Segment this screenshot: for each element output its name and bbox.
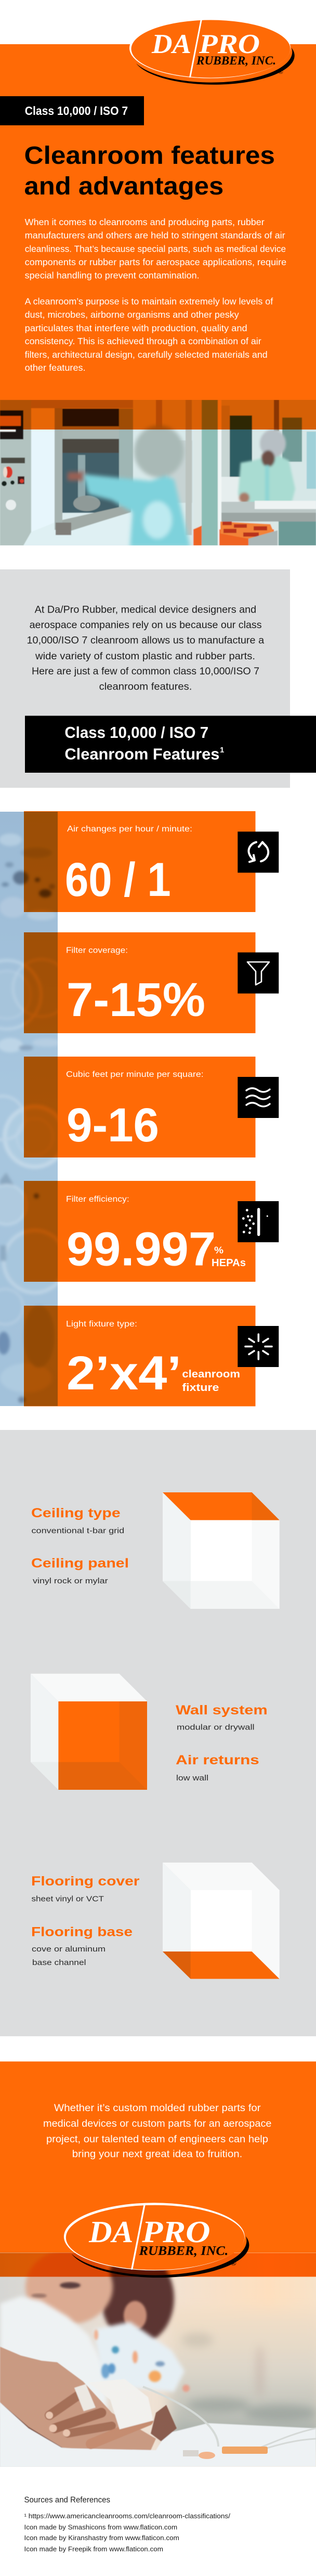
cube: floor highlighted — [163, 1863, 280, 1979]
logo: bottom: PRO — [141, 2215, 210, 2249]
sources and references: Icon made by Freepik from www.flaticon.com — [24, 2546, 163, 2553]
logo: top — [129, 18, 295, 85]
sources and references: ¹ https://www.americancleanrooms.com/cleanroom-classifications/ — [24, 2513, 231, 2520]
flooring text: Flooring base — [31, 1925, 133, 1940]
icon: light burst — [238, 1326, 279, 1367]
sources and references: Icon made by Smashicons from www.flaticon.com — [24, 2523, 177, 2531]
card: filter coverage: 7-15% — [67, 973, 205, 1026]
panel: orange intro — [0, 44, 316, 430]
intro paragraph 2: other features. — [25, 362, 86, 373]
logo: top: PRO — [199, 29, 260, 59]
intro paragraph 1: special handling to prevent contamination. — [25, 270, 200, 281]
flooring text: cove or aluminum — [32, 1945, 106, 1954]
card: filter efficiency — [24, 1181, 279, 1282]
wall text — [176, 1703, 268, 1783]
orange overlay band — [0, 400, 316, 430]
closing text — [43, 2103, 271, 2160]
closing text: project, our talented team of engineers can help — [46, 2134, 268, 2145]
card: cubic feet per minute: 9-16 — [67, 1099, 159, 1152]
title: Cleanroom features — [24, 142, 275, 170]
sources and references: Sources and References — [24, 2496, 110, 2505]
ceiling text: vinyl rock or mylar — [33, 1577, 108, 1585]
closing text: medical devices or custom parts for an aerospace — [43, 2118, 271, 2129]
grey panel text: wide variety of custom plastic and rubber parts. — [35, 650, 255, 662]
flooring text: base channel — [32, 1959, 86, 1967]
card: filter efficiency: Filter efficiency: — [66, 1195, 129, 1204]
intro paragraph 2: particulates that interfere with production, quality and — [25, 323, 247, 333]
wall text: Air returns — [176, 1753, 259, 1767]
card: filter efficiency: % — [214, 1245, 223, 1255]
wall text: low wall — [176, 1774, 208, 1783]
card: light fixture — [24, 1306, 279, 1406]
logo: bottom: DA — [88, 2215, 133, 2249]
card: light fixture: Light fixture type: — [66, 1320, 137, 1329]
grey panel text: Here are just a few of common class 10,000/ISO 7 — [32, 666, 259, 677]
icon: particles through filter — [238, 1201, 279, 1242]
closing text: bring your next great idea to fruition. — [72, 2149, 242, 2160]
grey panel text: cleanroom features. — [99, 681, 192, 693]
heading bar: cleanroom features — [25, 715, 316, 773]
flooring text: Flooring cover — [31, 1874, 140, 1889]
card: light fixture: fixture — [182, 1382, 219, 1394]
title — [24, 142, 275, 200]
grey panel text — [27, 604, 264, 693]
class label bar — [0, 96, 144, 125]
iv tube — [143, 2387, 316, 2459]
logo: bottom: ® — [231, 2259, 236, 2268]
flooring text: sheet vinyl or VCT — [31, 1895, 104, 1903]
card: filter coverage: Filter coverage: — [66, 946, 128, 955]
class label bar: Class 10,000 / ISO 7 — [25, 104, 128, 118]
card: air changes — [24, 811, 279, 912]
photo: cleanroom workers — [0, 400, 316, 547]
logo: top: RUBBER, INC. — [196, 54, 276, 67]
heading bar: cleanroom features: Class 10,000 / ISO 7 — [64, 723, 208, 741]
heading bar: cleanroom features: 1 — [220, 746, 224, 754]
intro paragraph 2 — [25, 296, 273, 373]
card: air changes: 60 / 1 — [65, 853, 171, 906]
icon: funnel — [238, 953, 279, 994]
intro paragraph 1 — [25, 217, 286, 281]
ceiling text: conventional t-bar grid — [31, 1527, 124, 1536]
ceiling text: Ceiling type — [31, 1506, 121, 1520]
logo: top: DA — [151, 29, 191, 59]
sources and references: Icon made by Kiranshastry from www.flaticon.com — [24, 2534, 179, 2542]
panel: grey intro — [0, 569, 290, 788]
intro paragraph 1: When it comes to cleanrooms and producing parts, rubber — [25, 217, 265, 227]
card: filter efficiency: HEPAs — [212, 1257, 246, 1269]
intro paragraph 1: components or rubber parts for aerospace applications, require — [25, 257, 286, 267]
control panel — [0, 410, 25, 510]
ceiling text: Ceiling panel — [31, 1556, 129, 1570]
panel: room components — [0, 1430, 316, 2036]
logo: bottom: RUBBER, INC. — [139, 2243, 228, 2258]
logo: bottom — [64, 2203, 249, 2278]
icon: refresh arrows — [238, 831, 279, 873]
card: light fixture: 2’x4’ — [67, 1347, 181, 1400]
orange overlay band — [0, 2253, 316, 2276]
card: light fixture: cleanroom — [182, 1369, 240, 1380]
card: filter efficiency: 99.997 — [67, 1223, 216, 1276]
icon: air waves — [238, 1077, 279, 1118]
steel table and orange tray — [193, 501, 316, 545]
grey panel text: At Da/Pro Rubber, medical device designers and — [35, 604, 256, 616]
flooring text — [31, 1874, 140, 1967]
cube: ceiling highlighted — [163, 1492, 280, 1609]
cube: walls highlighted — [31, 1674, 147, 1790]
photo: child's hand being held — [0, 2249, 316, 2467]
closing text: Whether it’s custom molded rubber parts for — [54, 2103, 261, 2114]
intro paragraph 2: dust, microbes, airborne organisms and other pesky — [25, 309, 239, 320]
intro paragraph 2: filters, architectural design, carefully selected materials and — [25, 349, 268, 360]
ceiling text — [31, 1506, 129, 1585]
panel: orange closing — [0, 2061, 316, 2276]
intro paragraph 1: cleanliness. That’s because special parts, such as medical device — [25, 243, 286, 254]
card: cubic feet per minute: Cubic feet per minute per square: — [66, 1070, 204, 1079]
title: and advantages — [24, 173, 223, 200]
intro paragraph 2: consistency. This is achieved through a combination of air — [25, 336, 261, 346]
card: cubic feet per minute — [24, 1057, 279, 1157]
card: filter coverage — [24, 932, 279, 1033]
grey panel text: 10,000/ISO 7 cleanroom allows us to manufacture a — [27, 635, 264, 646]
logo: top: ® — [278, 68, 283, 75]
grey panel text: aerospace companies rely on us because our class — [30, 619, 262, 631]
side photo: rubber parts — [0, 812, 58, 1406]
card: air changes: Air changes per hour / minute: — [67, 825, 192, 834]
intro paragraph 1: manufacturers and others are held to stringent standards of air — [25, 230, 285, 241]
sources and references — [24, 2496, 231, 2553]
worker foreground — [68, 425, 190, 547]
wall text: Wall system — [176, 1703, 268, 1718]
worker background — [238, 430, 295, 507]
intro paragraph 2: A cleanroom’s purpose is to maintain extremely low levels of — [25, 296, 273, 307]
hands — [0, 2347, 316, 2467]
heading bar: cleanroom features: Cleanroom Features — [64, 745, 219, 763]
wall text: modular or drywall — [177, 1724, 255, 1732]
